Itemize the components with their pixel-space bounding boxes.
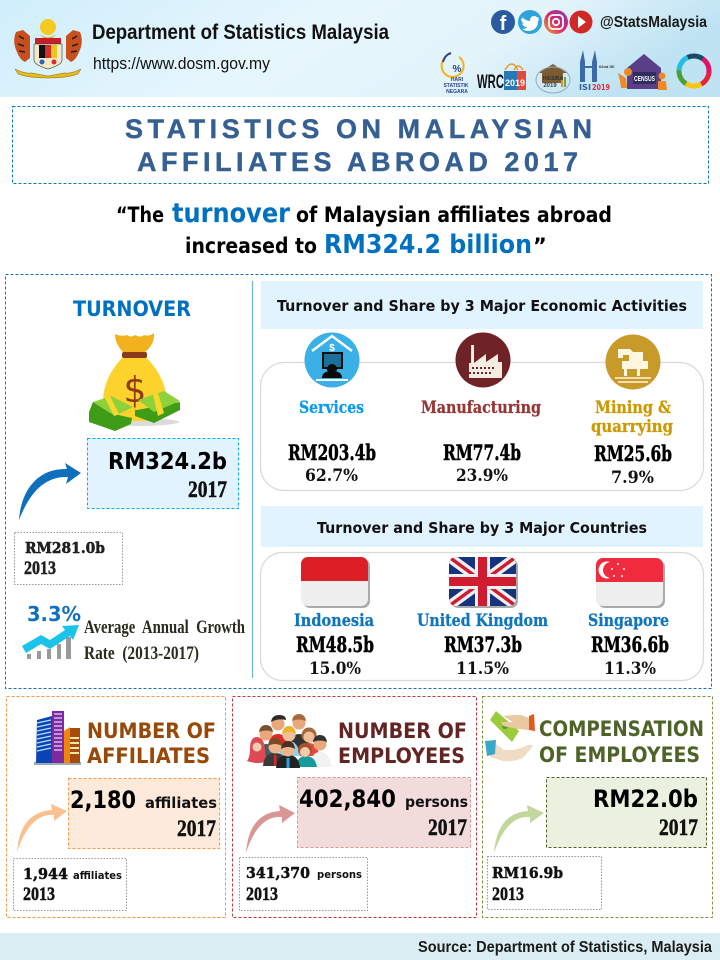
headline quote: “The (116, 203, 164, 227)
icon: facebook (491, 10, 515, 35)
logo: WRC 2019 (477, 64, 526, 93)
value box: 2017 employees: 2017 (428, 815, 467, 840)
value box: 2017 employees: 402,840 (299, 785, 396, 813)
arrow: compensation growth (494, 805, 544, 853)
text: growth caption (84, 617, 245, 664)
icon: money bag (89, 333, 180, 431)
value: United Kingdom: 11.5% (456, 659, 509, 679)
icon: money exchange hands (485, 711, 535, 761)
logo: WRC 2019: 2019 (505, 78, 525, 88)
logo: ISI 2019: 62nd ISI (599, 64, 614, 69)
text: growth caption: Rate (2013-2017) (84, 643, 199, 664)
value box: 2017 turnover (88, 438, 238, 508)
icon: services (304, 332, 360, 388)
value box: 2013 affiliates: affiliates (73, 870, 122, 882)
logo: ISI 2019 (579, 50, 614, 92)
icon: instagram (544, 10, 568, 34)
icon: UK flag (449, 557, 518, 608)
icon: services: $ (329, 343, 335, 354)
icon: money bag: $ (124, 370, 146, 411)
icon: manufacturing (456, 332, 510, 388)
icon: growth chart (22, 625, 79, 659)
value box: 2013 compensation: 2013 (492, 884, 524, 905)
text: Singapore: Singapore (588, 611, 669, 631)
heading: compensation of employees (539, 717, 704, 767)
text: Indonesia: Indonesia (294, 611, 374, 631)
header banner (0, 0, 720, 97)
heading: number of affiliates: NUMBER OF (87, 719, 216, 743)
value box: 2013 employees: persons (317, 869, 362, 881)
icon: mining (606, 334, 660, 390)
value: mining: RM25.6b (594, 441, 672, 466)
headline quote (116, 198, 612, 260)
arrow: turnover growth (19, 463, 81, 520)
heading: turnover: TURNOVER (73, 297, 191, 321)
panel: countries (260, 552, 704, 680)
text: manufacturing label: Manufacturing (421, 398, 541, 418)
logo: SDG wheel (679, 56, 709, 86)
value: manufacturing (443, 440, 521, 486)
value: services (288, 440, 376, 486)
icon: facebook: f (500, 13, 507, 35)
value: manufacturing: 23.9% (456, 466, 508, 486)
value: United Kingdom: RM37.3b (444, 632, 522, 657)
value: Indonesia: 15.0% (309, 659, 361, 679)
icon: youtube (570, 10, 592, 34)
title line 1: STATISTICS ON MALAYSIAN (125, 114, 592, 144)
headline quote: increased to (185, 234, 317, 258)
logo: hari statistik negara: HARI (451, 77, 464, 83)
heading: compensation of employees: OF EMPLOYEES (539, 743, 700, 767)
headline quote: of Malaysian affiliates abroad (296, 203, 612, 227)
heading band: economic activities (261, 281, 703, 329)
icon: people (247, 714, 332, 768)
value box: 2013 affiliates: 2013 (23, 884, 55, 905)
logo: ISI 2019: ISI (579, 83, 591, 92)
value box: 2017 employees: persons (405, 793, 468, 811)
logo: hari statistik negara (442, 53, 469, 95)
logo: house survey 2020: 2019 (543, 83, 557, 89)
value box: 2017 compensation: RM22.0b (593, 785, 698, 813)
value: services: RM203.4b (288, 440, 376, 465)
heading band: countries (261, 506, 703, 547)
heading: number of employees: NUMBER OF (338, 719, 467, 743)
value box: 2013 compensation: RM16.9b (492, 864, 563, 882)
headline quote: ” (533, 234, 547, 258)
value: Singapore: RM36.6b (591, 632, 669, 657)
text: mining label (591, 398, 673, 437)
heading band: economic activities: Turnover and Share by 3 Major Economic Activities (277, 297, 687, 315)
arrow: affiliates growth (17, 804, 67, 852)
arrow: employees growth (246, 805, 295, 853)
text: social handle: @StatsMalaysia (600, 14, 707, 31)
value box: 2017 compensation (546, 778, 706, 848)
value box: 2013 compensation (488, 856, 602, 910)
value box: 2013 employees: 341,370 (246, 864, 310, 882)
value box: 2013 turnover: 2013 (24, 558, 56, 579)
title box (12, 106, 708, 184)
value box: 2013 turnover: RM281.0b (25, 539, 105, 557)
icon: coat of arms (14, 19, 82, 78)
value box: 2017 compensation: 2017 (659, 815, 698, 840)
heading: department name: Department of Statistics Malaysia (92, 21, 389, 44)
headline quote: RM324.2 billion (324, 230, 532, 260)
logo: house survey 2020 (536, 64, 570, 93)
icon: Singapore flag (596, 558, 665, 608)
value: services: 62.7% (305, 466, 358, 486)
value box: 2017 employees (298, 778, 470, 848)
heading band: countries: Turnover and Share by 3 Major Countries (317, 519, 647, 537)
value box: 2017 affiliates (68, 778, 220, 848)
logo: house survey 2020: HIES/BA (543, 76, 564, 82)
text: United Kingdom: United Kingdom (417, 611, 548, 631)
value box: 2013 turnover (14, 532, 122, 584)
icon: Indonesia flag (301, 557, 370, 608)
value box: 2017 affiliates: 2017 (177, 816, 216, 841)
logo: hari statistik negara: NEGARA (446, 89, 468, 95)
value box: 2017 affiliates: affiliates (145, 794, 217, 812)
value: Singapore: 11.3% (604, 659, 656, 679)
value: United Kingdom (444, 632, 522, 679)
panel: turnover (6, 274, 712, 688)
value box: 2017 turnover: RM324.2b (108, 449, 227, 475)
title line 2: AFFILIATES ABROAD 2017 (137, 147, 578, 177)
icon: twitter (518, 10, 542, 34)
footer: source (0, 933, 720, 960)
value box: 2013 affiliates (14, 858, 126, 910)
panel: economic activities (260, 332, 704, 490)
text: website: https://www.dosm.gov.my (93, 54, 270, 73)
value box: 2017 turnover: 2017 (188, 477, 227, 502)
panel: compensation of employees (482, 696, 712, 918)
logo: WRC 2019: WRC (477, 72, 504, 93)
logo: ISI 2019: 2019 (592, 83, 610, 92)
value: manufacturing: RM77.4b (443, 440, 521, 465)
text: growth caption: Average Annual Growth (84, 617, 245, 638)
text: growth value: 3.3% (27, 602, 81, 626)
panel: number of employees (232, 696, 476, 918)
logo: hari statistik negara: % (453, 64, 462, 75)
value: Indonesia (296, 632, 374, 679)
text: mining label: Mining & (595, 398, 672, 418)
value box: 2013 employees (240, 858, 368, 910)
heading: number of affiliates: AFFILIATES (87, 744, 210, 768)
value box: 2013 employees: 2013 (246, 884, 278, 905)
logo: hari statistik negara: STATISTIK (443, 83, 469, 89)
text: mining label: quarrying (591, 417, 673, 437)
value: mining (594, 441, 672, 488)
value: mining: 7.9% (611, 468, 654, 488)
heading: number of employees (338, 719, 467, 768)
growth rate (22, 602, 245, 664)
value box: 2017 affiliates: 2,180 (70, 786, 136, 814)
panel: number of affiliates (6, 696, 226, 918)
value: Singapore (591, 632, 669, 679)
heading: number of affiliates (87, 719, 216, 768)
icon: buildings (34, 711, 81, 765)
text: services label: Services (299, 398, 364, 418)
logo: census 2020: CENSUS (634, 76, 655, 83)
value box: 2013 affiliates: 1,944 (23, 865, 68, 883)
headline quote: turnover (172, 198, 291, 229)
value: Indonesia: RM48.5b (296, 632, 374, 657)
logo: census 2020 (618, 54, 667, 90)
heading: number of employees: EMPLOYEES (338, 744, 465, 768)
